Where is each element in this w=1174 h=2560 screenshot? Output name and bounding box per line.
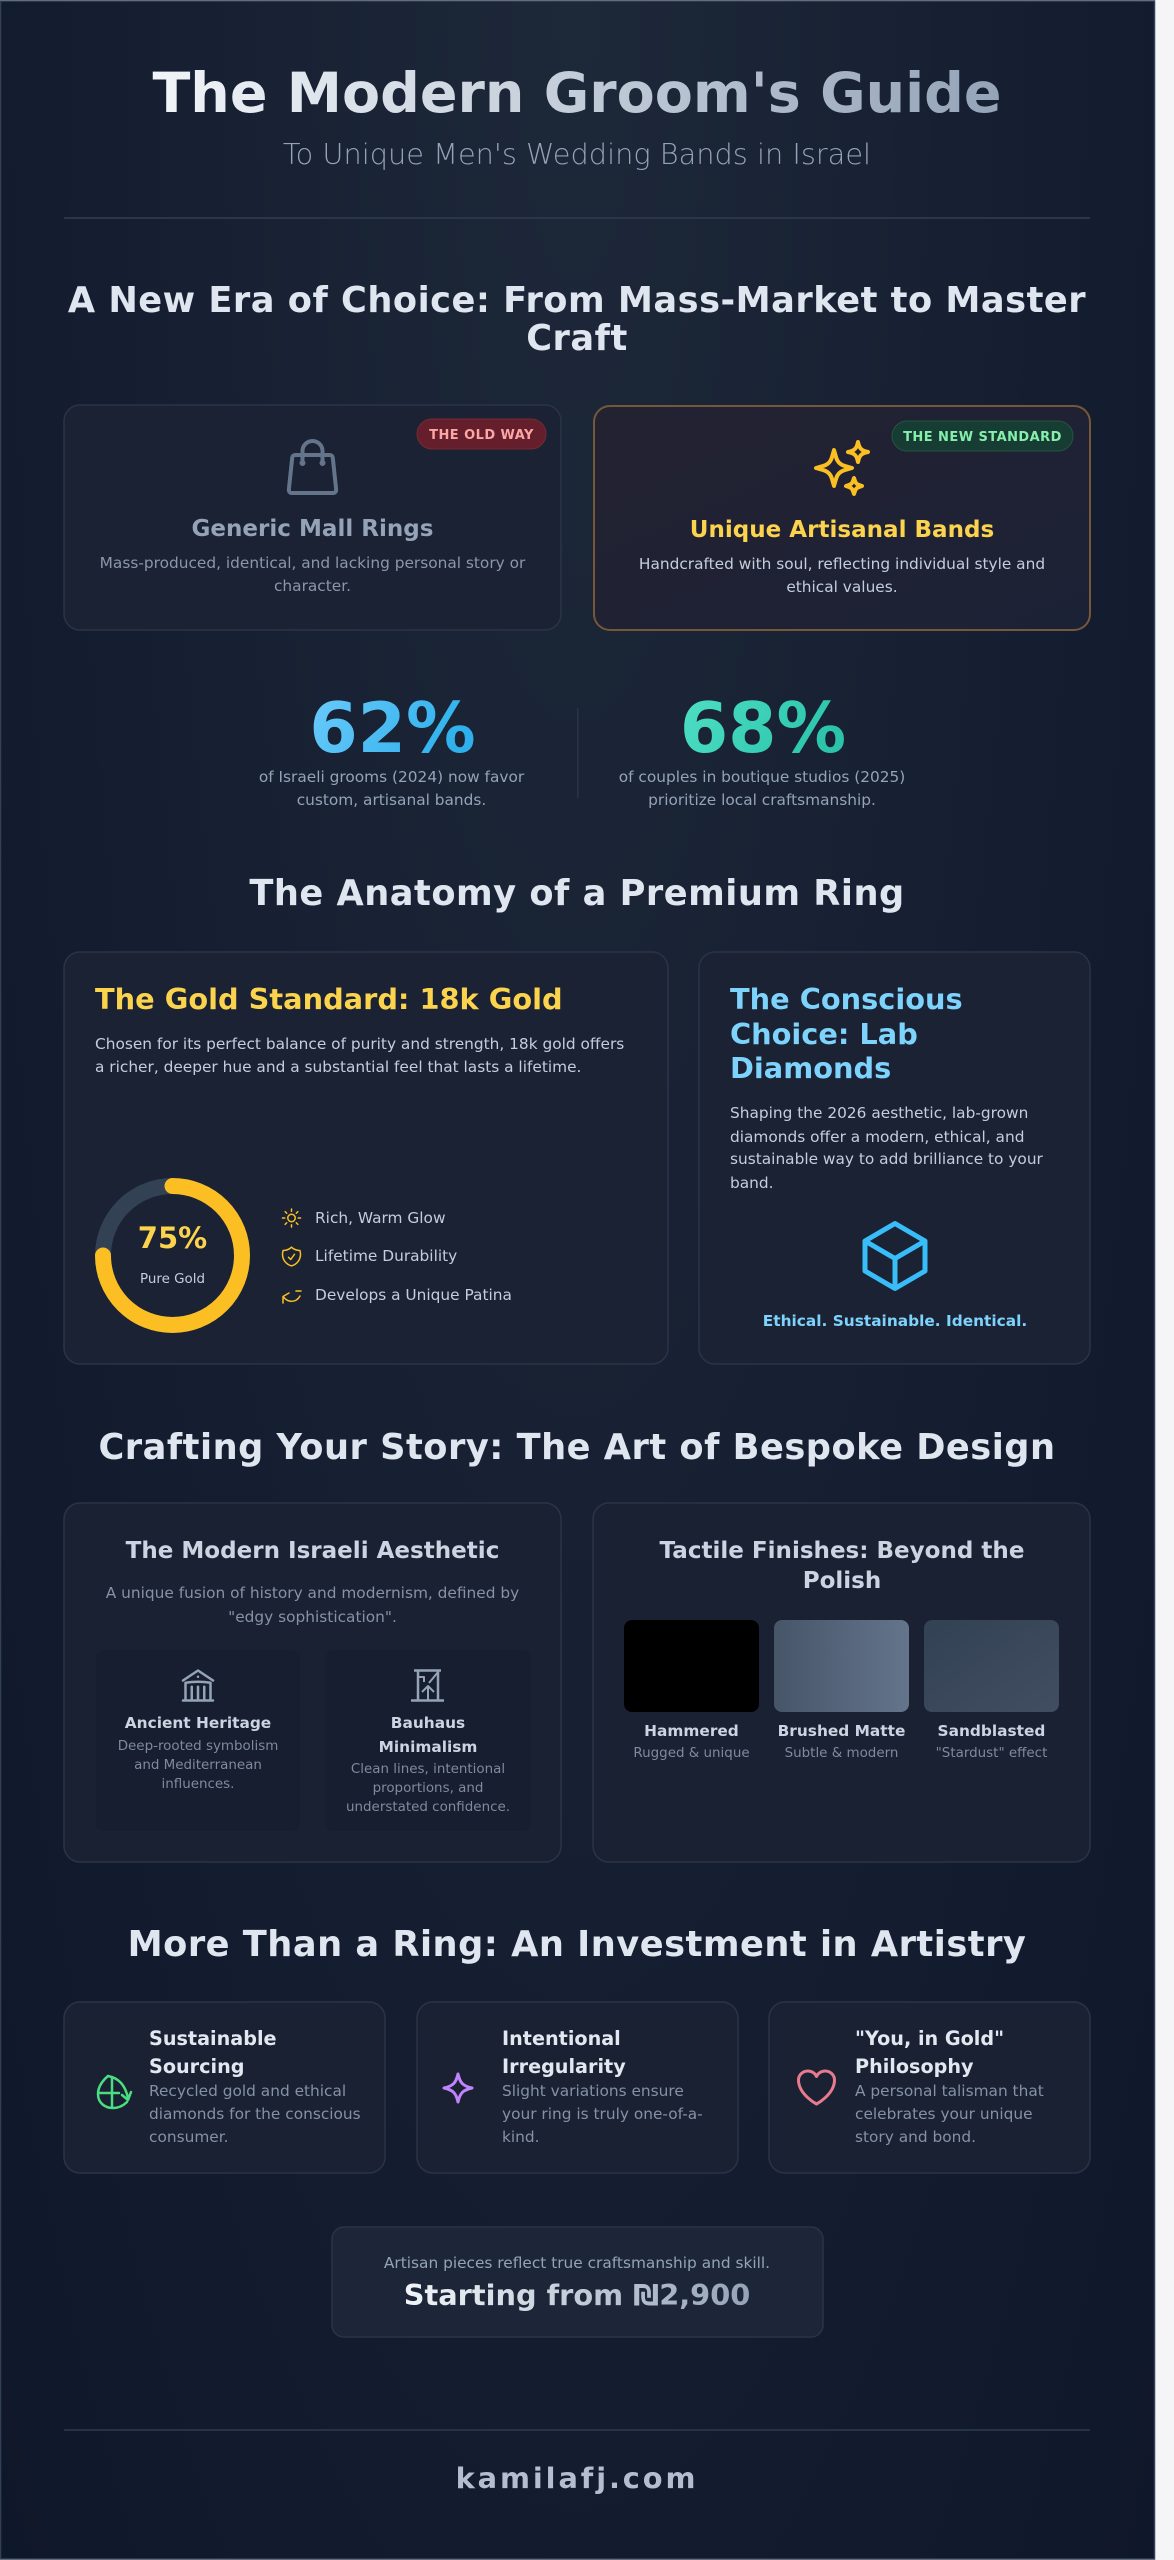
panel: you in gold philosophy xyxy=(769,2002,1090,2173)
icon: cube xyxy=(865,1223,925,1288)
sub-card: ancient heritage: and Mediterranean xyxy=(134,1758,262,1773)
panel: tactile finishes xyxy=(593,1503,1090,1862)
panel: gold standard xyxy=(64,952,668,1364)
panel: sustainable sourcing xyxy=(64,2002,385,2173)
heading: a new era of choice xyxy=(68,280,1086,359)
card description xyxy=(639,555,1045,596)
sub-card: ancient heritage: influences. xyxy=(162,1777,234,1792)
card heading: The Modern Israeli Aesthetic xyxy=(126,1538,499,1564)
stat: 62%: of Israeli grooms (2024) now favor xyxy=(259,768,525,786)
panel: you in gold philosophy: A personal talisman that xyxy=(855,2082,1044,2100)
sub-card: bauhaus minimalism: understated confidence. xyxy=(346,1800,510,1815)
card description xyxy=(100,554,526,595)
card description: Shaping the 2026 aesthetic, lab-grown xyxy=(730,1104,1028,1122)
card heading: Diamonds xyxy=(730,1051,891,1085)
finish: sandblasted xyxy=(924,1620,1059,1761)
card description: Mass-produced, identical, and lacking personal story or xyxy=(100,554,526,572)
card heading xyxy=(660,1538,1024,1594)
header xyxy=(152,61,1002,171)
badge: the old way xyxy=(417,419,546,449)
sub-card: bauhaus minimalism: Bauhaus xyxy=(391,1714,465,1732)
card description: band. xyxy=(730,1174,774,1192)
callout: starting price xyxy=(332,2227,823,2337)
feature list: Lifetime Durability xyxy=(315,1247,457,1265)
sub-card: bauhaus minimalism: proportions, and xyxy=(373,1781,483,1796)
card description: "edgy sophistication". xyxy=(228,1608,397,1626)
subtitle: To Unique Men's Wedding Bands in Israel xyxy=(283,137,871,171)
panel: sustainable sourcing: Sourcing xyxy=(149,2055,244,2078)
panel: modern israeli aesthetic xyxy=(64,1503,561,1862)
badge: the new standard: THE NEW STANDARD xyxy=(903,430,1062,445)
panel: sustainable sourcing: consumer. xyxy=(149,2128,229,2146)
panel: intentional irregularity: Irregularity xyxy=(502,2055,626,2078)
icon: bauhaus building xyxy=(411,1670,444,1700)
donut chart: 75% pure gold: Pure Gold xyxy=(140,1272,205,1287)
icon: heart xyxy=(798,2071,834,2104)
finish: brushed matte: Brushed Matte xyxy=(778,1722,905,1740)
sub-card: ancient heritage: Deep-rooted symbolism xyxy=(118,1739,278,1754)
card title: Generic Mall Rings xyxy=(192,516,433,542)
panel: intentional irregularity: your ring is truly one-of-a- xyxy=(502,2105,703,2123)
finish: brushed matte: Subtle & modern xyxy=(785,1746,898,1761)
finish: hammered: Rugged & unique xyxy=(633,1746,750,1761)
card heading: Choice: Lab xyxy=(730,1017,918,1051)
callout: starting price: Starting from ₪2,900 xyxy=(404,2278,750,2312)
card description: sustainable way to add brilliance to your xyxy=(730,1150,1044,1168)
footer: website: kamilafj.com xyxy=(456,2461,698,2495)
stat: 62%: 62% xyxy=(309,688,476,769)
finish: hammered xyxy=(624,1620,759,1761)
card heading: The Gold Standard: 18k Gold xyxy=(95,982,563,1016)
card heading xyxy=(730,982,963,1085)
panel: you in gold philosophy: celebrates your unique xyxy=(855,2105,1033,2123)
card title: Unique Artisanal Bands xyxy=(690,517,994,543)
sub-card: bauhaus minimalism xyxy=(326,1650,531,1831)
panel: lab diamonds xyxy=(699,952,1090,1364)
panel: sustainable sourcing: Sustainable xyxy=(149,2027,277,2050)
feature list: Develops a Unique Patina xyxy=(315,1286,512,1304)
panel: the new standard xyxy=(594,406,1090,630)
donut chart: 75% pure gold xyxy=(103,1186,242,1325)
panel: intentional irregularity: Slight variations ensure xyxy=(502,2082,684,2100)
card description: ethical values. xyxy=(786,578,898,596)
finish: hammered: Hammered xyxy=(644,1722,739,1740)
card description: diamonds offer a modern, ethical, and xyxy=(730,1128,1024,1146)
badge: the new standard xyxy=(892,421,1073,451)
icon: columned building xyxy=(183,1671,213,1701)
heading: anatomy of a premium ring: The Anatomy of a Premium Ring xyxy=(249,873,905,914)
finish: sandblasted: "Stardust" effect xyxy=(936,1746,1047,1761)
panel: sustainable sourcing: diamonds for the conscious xyxy=(149,2105,361,2123)
icon: sun xyxy=(282,1209,300,1227)
card heading: Polish xyxy=(803,1568,881,1594)
panel: intentional irregularity: Intentional xyxy=(502,2027,621,2050)
card description: a richer, deeper hue and a substantial feel that lasts a lifetime. xyxy=(95,1058,581,1076)
card description: Chosen for its perfect balance of purity and strength, 18k gold offers xyxy=(95,1035,624,1053)
heading: more than a ring: More Than a Ring: An Investment in Artistry xyxy=(128,1924,1026,1965)
panel: intentional irregularity xyxy=(417,2002,738,2173)
panel: the old way xyxy=(64,405,561,630)
card description xyxy=(106,1584,519,1626)
icon: shield xyxy=(282,1247,300,1266)
feature list: Rich, Warm Glow xyxy=(315,1209,446,1227)
heading: a new era of choice: A New Era of Choice: From Mass-Market to Master xyxy=(68,280,1086,321)
panel: intentional irregularity: kind. xyxy=(502,2128,540,2146)
card description: Handcrafted with soul, reflecting individual style and xyxy=(639,555,1045,573)
sub-card: bauhaus minimalism: Clean lines, intentional xyxy=(351,1762,505,1777)
title: The Modern Groom's Guide xyxy=(152,61,1002,126)
stat: 68%: prioritize local craftsmanship. xyxy=(648,791,876,809)
icon: patina arrow xyxy=(283,1291,301,1303)
panel: sustainable sourcing: Recycled gold and ethical xyxy=(149,2082,346,2100)
card description xyxy=(95,1035,624,1076)
stat: 68%: of couples in boutique studios (2025) xyxy=(619,768,905,786)
sub-card: bauhaus minimalism: Minimalism xyxy=(379,1738,477,1756)
donut chart: 75% pure gold: 75% xyxy=(138,1221,207,1255)
panel: you in gold philosophy: Philosophy xyxy=(855,2055,974,2078)
stat: 68%: 68% xyxy=(680,688,846,769)
finish: brushed matte xyxy=(774,1620,909,1761)
feature list xyxy=(282,1209,512,1304)
sub-card: ancient heritage xyxy=(96,1650,300,1831)
card heading: The Conscious xyxy=(730,982,963,1016)
heading: crafting your story: Crafting Your Story: The Art of Bespoke Design xyxy=(98,1427,1056,1468)
card description: character. xyxy=(274,577,351,595)
tagline: Ethical. Sustainable. Identical. xyxy=(763,1312,1027,1330)
icon: four point star xyxy=(444,2074,472,2102)
stat: 62%: custom, artisanal bands. xyxy=(297,791,486,809)
card description xyxy=(730,1104,1044,1192)
icon: shopping bag xyxy=(289,441,336,493)
stat: 62% xyxy=(259,688,525,809)
badge: the old way: THE OLD WAY xyxy=(429,428,534,443)
card heading: Tactile Finishes: Beyond the xyxy=(660,1538,1024,1564)
callout: starting price: Artisan pieces reflect true craftsmanship and skill. xyxy=(384,2254,770,2272)
sub-card: ancient heritage: Ancient Heritage xyxy=(125,1714,271,1732)
panel: you in gold philosophy: "You, in Gold" xyxy=(855,2027,1004,2050)
card description: A unique fusion of history and modernism, defined by xyxy=(106,1584,519,1602)
icon: recycled leaf xyxy=(98,2076,131,2108)
icon: sparkles xyxy=(816,442,868,494)
finish: sandblasted: Sandblasted xyxy=(938,1722,1045,1740)
panel: you in gold philosophy: story and bond. xyxy=(855,2128,976,2146)
heading: a new era of choice: Craft xyxy=(526,318,628,359)
stat: 68% xyxy=(619,688,905,809)
